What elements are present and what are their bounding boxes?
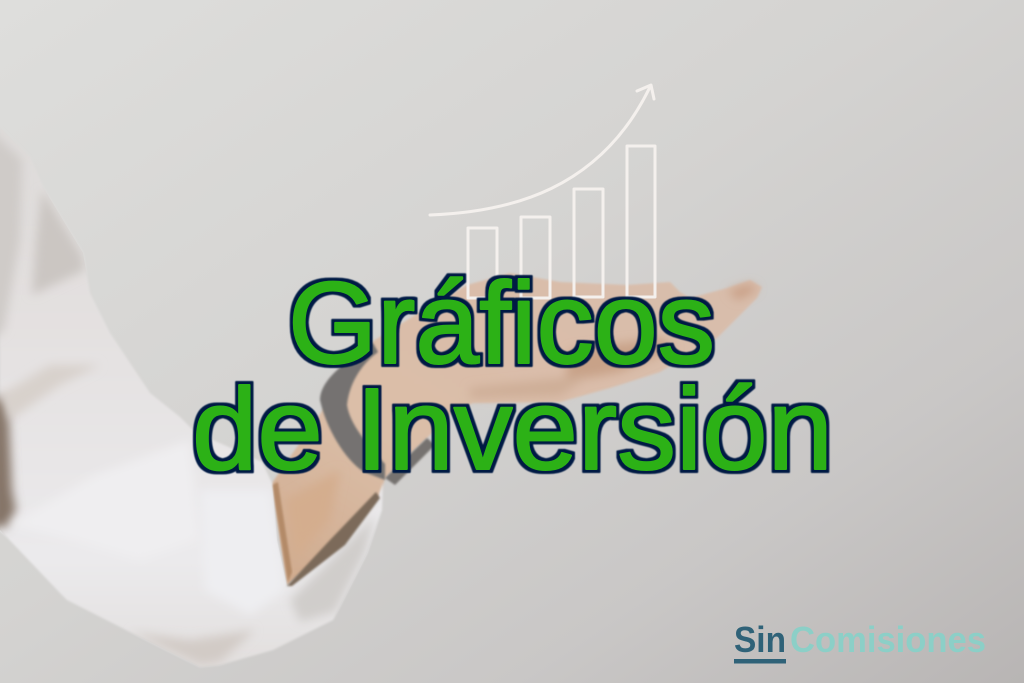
logo word Comisiones: Comisiones [790, 619, 986, 660]
watch strap [320, 343, 385, 480]
metal watch clasp [385, 438, 435, 485]
photo: arm and open hand [0, 127, 762, 667]
bar 2 [521, 217, 550, 298]
shirt sleeve [0, 127, 383, 667]
bar 4 [627, 146, 655, 297]
left edge brown shadow [0, 395, 16, 528]
title [192, 258, 833, 494]
inner arm edge shadow [272, 482, 292, 582]
rising trend arrow [430, 85, 654, 215]
bar 3 [574, 189, 603, 297]
growth chart [430, 85, 655, 298]
bar 1 [468, 228, 497, 298]
shirt folds and shadows [0, 130, 375, 665]
forearm and hand [272, 273, 762, 585]
logo underline [734, 659, 786, 664]
title line 2: de Inversión [192, 364, 833, 494]
logo word Sin: Sin [734, 619, 786, 660]
wrist shadow [287, 492, 380, 586]
upper sleeve shadow [32, 190, 85, 295]
title line 1: Gráficos [288, 258, 715, 388]
palm creases and shadows [285, 284, 758, 560]
logo: SinComisiones [734, 619, 986, 664]
